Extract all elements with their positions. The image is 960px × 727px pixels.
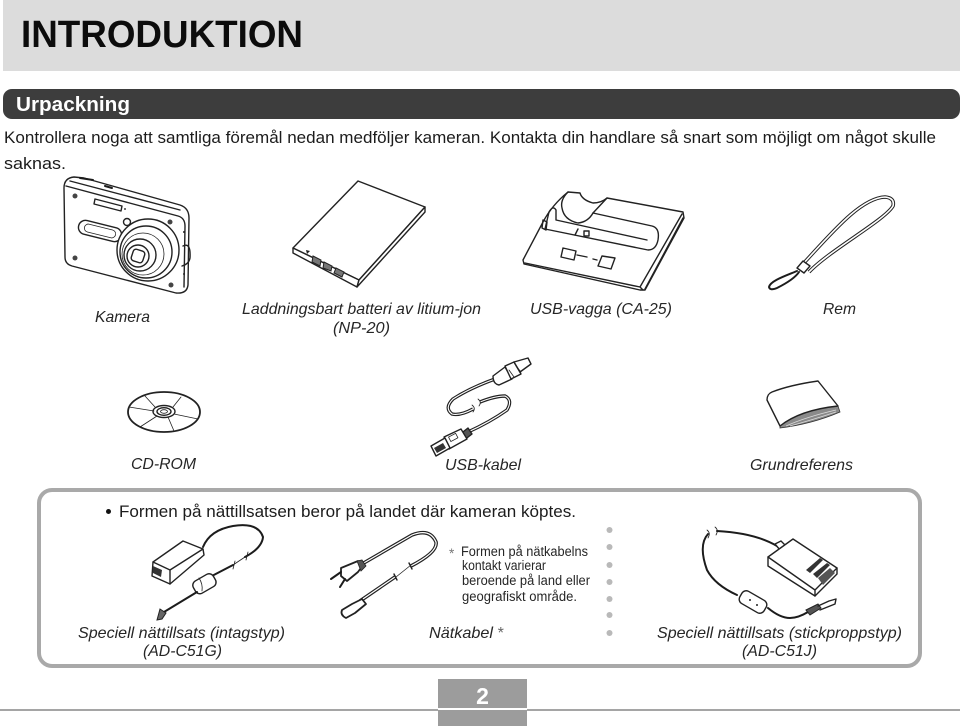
note: plug shape: geografiskt område. (462, 589, 577, 604)
icon: camera (64, 177, 190, 293)
caption: Nätkabel: Nätkabel (429, 625, 493, 642)
icon: USB cable (431, 358, 531, 456)
dotted separator (606, 527, 612, 636)
intro text (4, 128, 936, 173)
caption: USB-vagga: USB-vagga (CA-25) (530, 301, 672, 318)
note: plug shape: * (449, 546, 455, 561)
caption: intake type adapter (78, 625, 285, 660)
title banner (3, 0, 960, 71)
icon: basic reference booklet (767, 381, 840, 428)
page number (438, 679, 527, 726)
intro text: saknas. (4, 154, 66, 173)
note: plug shape: kontakt varierar (462, 558, 546, 573)
title banner: INTRODUKTION (21, 14, 303, 56)
icon: wrist strap (769, 197, 893, 289)
caption: intake type adapter: (AD-C51G) (143, 643, 222, 660)
caption: plug type adapter (657, 625, 902, 660)
icon: CD-ROM (128, 392, 200, 432)
icon: AC adapter plug type (703, 527, 837, 618)
caption: Grundreferens: Grundreferens (750, 457, 853, 474)
caption: Kamera: Kamera (95, 309, 150, 326)
icon: power cord (331, 533, 436, 618)
caption: plug type adapter: (AD-C51J) (742, 643, 817, 660)
note: plug shape: Formen på nätkabelns (461, 544, 588, 559)
icon: battery (293, 181, 425, 287)
caption: Rem: Rem (823, 301, 856, 318)
icon: USB cradle (523, 192, 684, 290)
footer rule (0, 709, 960, 711)
caption: intake type adapter: Speciell nättillsats (intagstyp) (78, 625, 285, 642)
section heading: Urpackning (3, 89, 960, 119)
note: plug shape (449, 544, 590, 604)
panel notice: Formen på nättillsatsen beror på landet där kameran köptes. (119, 503, 576, 521)
caption: battery (242, 301, 481, 337)
caption: battery: Laddningsbart batteri av litium-jon (242, 301, 481, 318)
page number: 2 (476, 683, 489, 709)
caption: USB-kabel: USB-kabel (445, 457, 521, 474)
caption: battery: (NP-20) (333, 320, 390, 337)
caption: Nätkabel: * (497, 625, 504, 642)
panel: AC adapter options (39, 490, 920, 666)
note: plug shape: beroende på land eller (462, 573, 590, 588)
intro text: Kontrollera noga att samtliga föremål nedan medföljer kameran. Kontakta din handlare så snart som möjligt om något skulle (4, 128, 936, 147)
icon: AC adapter intake type (152, 525, 263, 620)
caption: plug type adapter: Speciell nättillsats (stickproppstyp) (657, 625, 902, 642)
caption: CD-ROM: CD-ROM (131, 456, 197, 473)
panel frame (39, 490, 920, 666)
section heading: Urpackning: Urpackning (16, 94, 130, 116)
